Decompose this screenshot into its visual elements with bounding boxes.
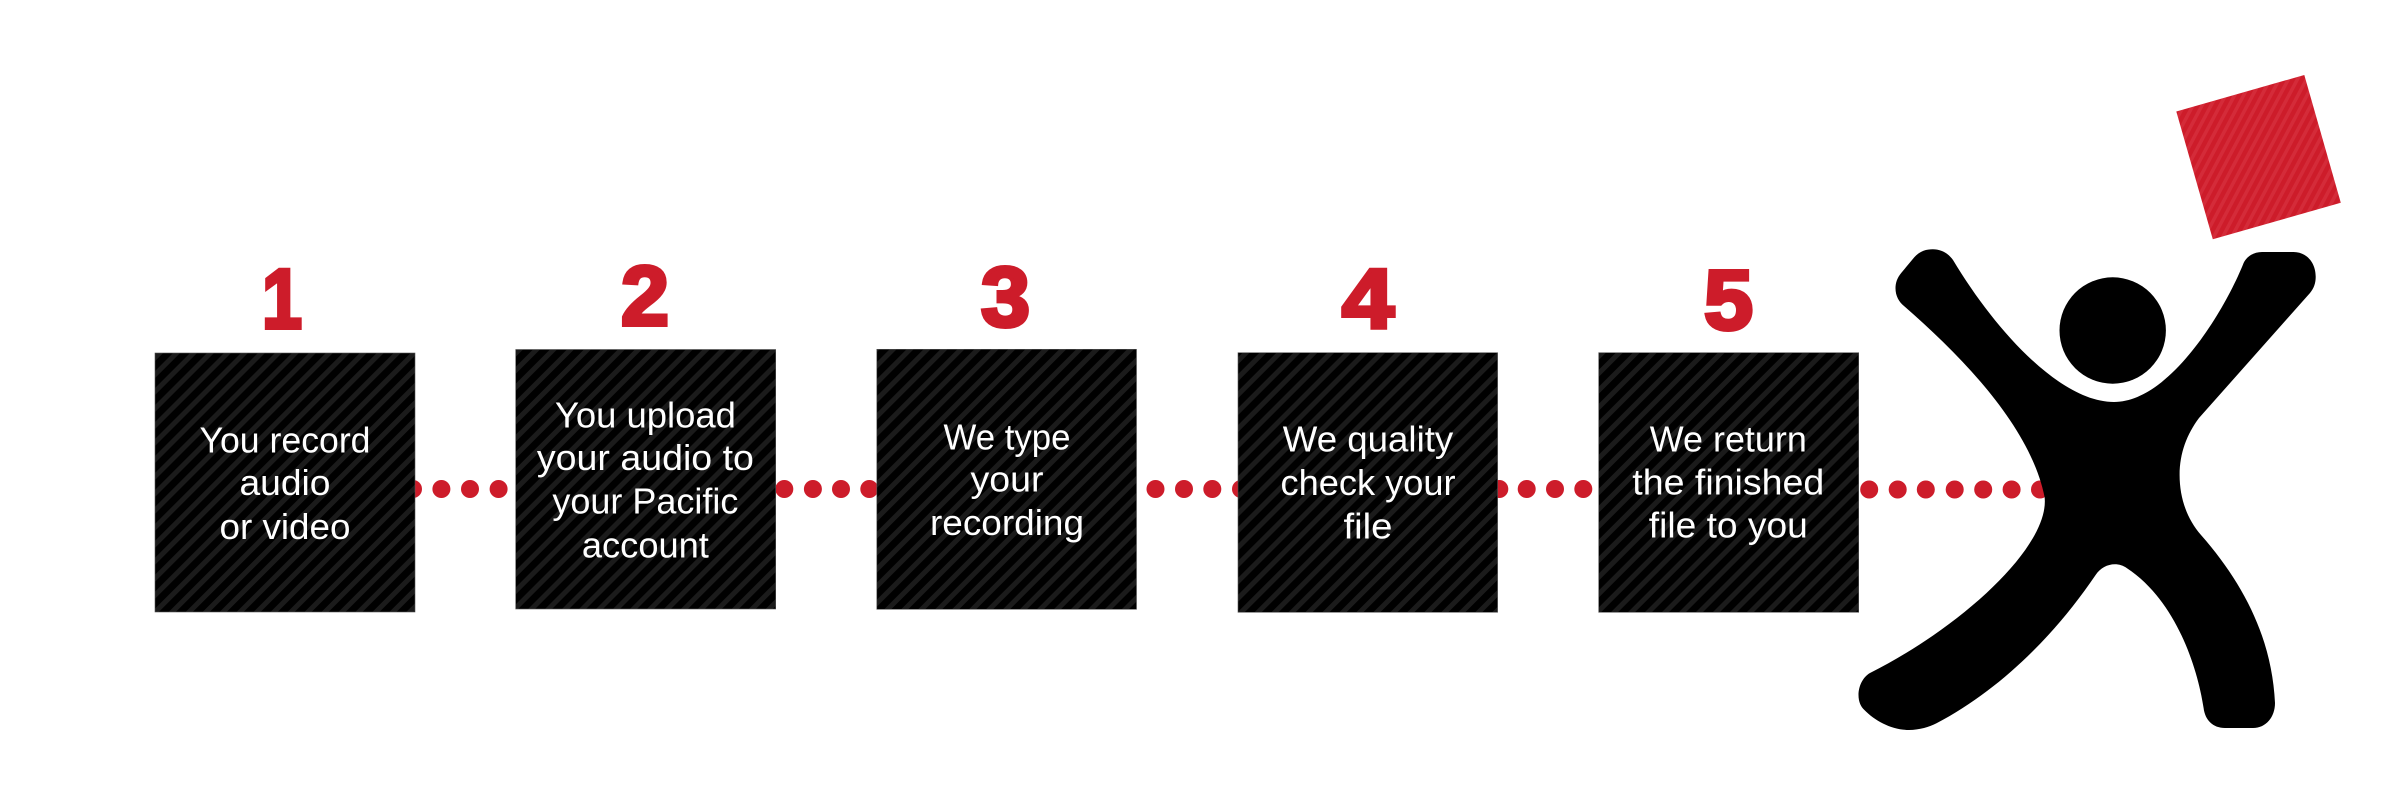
- text: You record audio or video: audio: [240, 462, 330, 503]
- connector dots: step 5 to figure: [1860, 480, 2049, 498]
- text: You upload your audio to your Pacific account: account: [582, 524, 709, 565]
- number 5: 5: [1704, 253, 1753, 347]
- number 3: 3: [981, 250, 1030, 344]
- text: We quality check your file: file: [1344, 505, 1392, 546]
- step 4: [1238, 252, 1498, 612]
- connector dots: steps 2 to 3: [775, 480, 878, 498]
- text: You upload your audio to your Pacific account: your Pacific: [552, 480, 738, 521]
- step 2: [516, 249, 776, 609]
- icon: tilted red square: [2176, 75, 2341, 239]
- text: We return the finished file to you: We return: [1650, 418, 1807, 459]
- number 4: 4: [1342, 252, 1394, 346]
- box 1: [155, 353, 415, 612]
- text: We type your recording: We type: [944, 416, 1070, 457]
- text: We type your recording: [930, 416, 1084, 543]
- text: You record audio or video: [200, 420, 370, 547]
- text: We quality check your file: [1280, 419, 1456, 546]
- text: We quality check your file: We quality: [1283, 419, 1453, 460]
- text: You record audio or video: You record: [200, 420, 370, 461]
- box 4: [1238, 353, 1498, 612]
- text: You upload your audio to your Pacific account: You upload: [555, 394, 736, 435]
- figure head: [2060, 277, 2166, 384]
- text: We type your recording: recording: [930, 502, 1084, 543]
- connector dots: steps 3 to 4: [1146, 480, 1250, 498]
- connector dots: steps 4 to 5: [1490, 480, 1592, 498]
- figure body: [1858, 249, 2316, 730]
- text: You record audio or video: or video: [220, 506, 350, 547]
- text: We type your recording: your: [970, 459, 1044, 500]
- step 5: [1599, 253, 1859, 612]
- connector dots: steps 1 to 2: [404, 480, 508, 498]
- text: We return the finished file to you: [1632, 418, 1824, 545]
- text: We return the finished file to you: file to you: [1649, 504, 1808, 545]
- box 5: [1599, 353, 1859, 612]
- text: You upload your audio to your Pacific account: [537, 394, 754, 565]
- text: We quality check your file: check your: [1280, 462, 1456, 503]
- number 1: 1: [262, 252, 302, 346]
- text: We return the finished file to you: the finished: [1632, 461, 1824, 502]
- step 1: [155, 252, 415, 612]
- text: You upload your audio to your Pacific account: your audio to: [537, 437, 754, 478]
- number 2: 2: [621, 249, 669, 343]
- box 3: [877, 349, 1136, 609]
- step 3: [877, 250, 1136, 609]
- box 2: [516, 350, 776, 609]
- icon: jumping figure: [1858, 249, 2316, 730]
